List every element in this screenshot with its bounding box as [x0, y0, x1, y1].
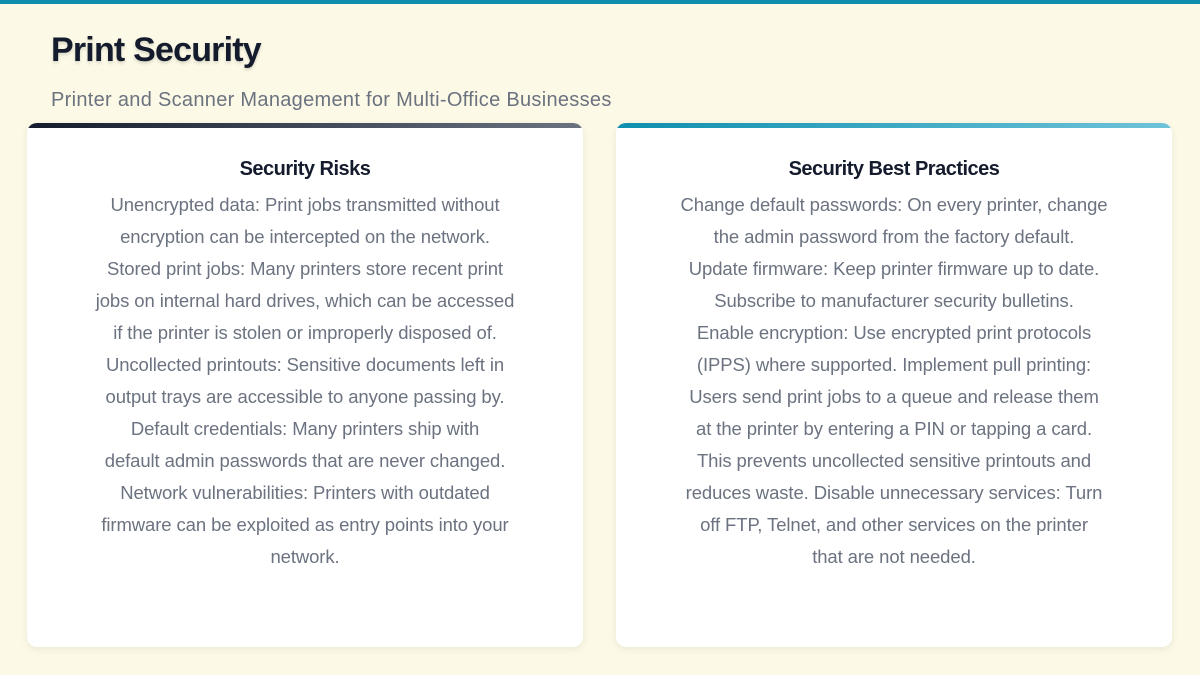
text: practices list: at the printer by entering a PIN or tapping a card.	[696, 418, 1092, 439]
text: risks list: default admin passwords that are never changed.	[105, 450, 505, 471]
text: practices list	[681, 194, 1107, 567]
text: risks list: Network vulnerabilities: Printers with outdated	[120, 482, 490, 503]
text: risks list: Default credentials: Many printers ship with	[131, 418, 479, 439]
text: risks list: firmware can be exploited as entry points into your	[101, 514, 509, 535]
text: risks list: Unencrypted data: Print jobs transmitted without	[110, 194, 500, 215]
text: risks list: output trays are accessible to anyone passing by.	[106, 386, 504, 407]
heading: security risks: Security Risks	[240, 158, 370, 180]
text: practices list: Users send print jobs to a queue and release them	[689, 386, 1099, 407]
text: risks list: jobs on internal hard drives, which can be accessed	[96, 290, 514, 311]
panel: security risks	[27, 123, 583, 647]
text: risks list	[95, 194, 514, 567]
text: practices list: reduces waste. Disable unnecessary services: Turn	[686, 482, 1102, 503]
text: risks list: if the printer is stolen or improperly disposed of.	[113, 322, 497, 343]
text: risks list: encryption can be intercepted on the network.	[120, 226, 490, 247]
text: practices list: the admin password from the factory default.	[714, 226, 1074, 247]
text: practices list: Subscribe to manufacturer security bulletins.	[714, 290, 1074, 311]
text: practices list: Change default passwords: On every printer, change	[681, 194, 1107, 215]
text: risks list: Uncollected printouts: Sensitive documents left in	[106, 354, 504, 375]
text: risks list: network.	[270, 546, 340, 567]
text: risks list: Stored print jobs: Many printers store recent print	[107, 258, 503, 279]
text: practices list: off FTP, Telnet, and other services on the printer	[700, 514, 1088, 535]
text: practices list: Update firmware: Keep printer firmware up to date.	[689, 258, 1099, 279]
title: Print Security	[51, 31, 261, 69]
subtitle: Printer and Scanner Management for Multi-Office Businesses	[51, 89, 612, 111]
text: practices list: Enable encryption: Use encrypted print protocols	[697, 322, 1091, 343]
text: practices list: This prevents uncollected sensitive printouts and	[697, 450, 1091, 471]
panel: best practices	[616, 123, 1172, 647]
heading: best practices: Security Best Practices	[789, 158, 999, 180]
text: practices list: (IPPS) where supported. Implement pull printing:	[697, 354, 1091, 375]
text: practices list: that are not needed.	[812, 546, 976, 567]
